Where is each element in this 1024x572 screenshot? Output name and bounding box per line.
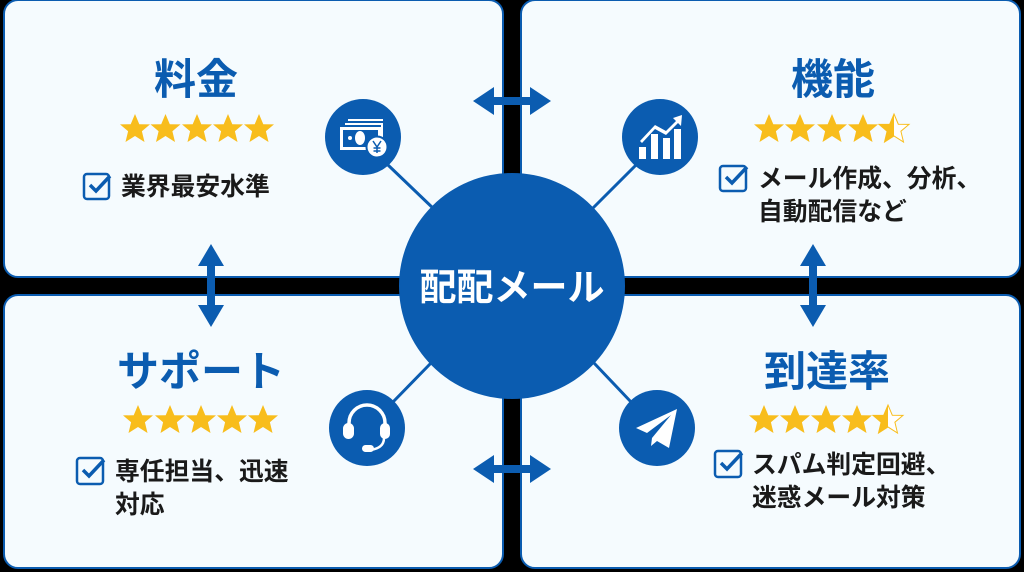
- panel: 機能: [521, 0, 1020, 277]
- rating: five stars: [123, 405, 278, 433]
- text: 業界最安水準: 業界最安水準: [121, 173, 270, 201]
- icon: money: [325, 99, 401, 175]
- text: deliverability description: 迷惑メール対策: [752, 484, 926, 512]
- heading: 到達率: 到達率: [764, 348, 890, 395]
- text: deliverability description: スパム判定回避、: [752, 451, 950, 479]
- center circle: [399, 173, 625, 399]
- connector lines: [388, 165, 636, 403]
- icon: checkbox: [715, 451, 742, 477]
- icon: headset: [329, 390, 405, 466]
- icon: checkbox: [84, 174, 110, 199]
- heading: 料金: 料金: [154, 56, 238, 103]
- text: support description: 専任担当、迅速: [115, 458, 289, 486]
- icon: checkbox: [720, 166, 747, 191]
- arrow: right vertical: [800, 244, 826, 327]
- icon: growth chart: [622, 99, 698, 175]
- text: deliverability description: [752, 451, 950, 512]
- panel: 料金: [4, 0, 503, 277]
- arrow: bottom horizontal: [473, 455, 551, 483]
- text: features description: [758, 165, 981, 226]
- icon: paper plane: [619, 390, 695, 466]
- text: support description: 対応: [115, 491, 165, 519]
- heading: 機能: 機能: [791, 56, 875, 103]
- center label: 配配メール: [420, 267, 604, 308]
- rating: five stars: [120, 114, 274, 142]
- text: support description: [115, 458, 289, 519]
- panel: サポート: [4, 295, 503, 568]
- heading: サポート: サポート: [117, 348, 285, 395]
- text: features description: 自動配信など: [758, 198, 907, 226]
- panel: 到達率: [521, 295, 1020, 568]
- rating: four and a half stars: [754, 114, 909, 142]
- icon: checkbox: [77, 458, 104, 484]
- arrow: left vertical: [198, 244, 224, 327]
- rating: four and a half stars: [749, 405, 903, 433]
- text: features description: メール作成、分析、: [758, 165, 981, 193]
- arrow: top horizontal: [473, 87, 551, 115]
